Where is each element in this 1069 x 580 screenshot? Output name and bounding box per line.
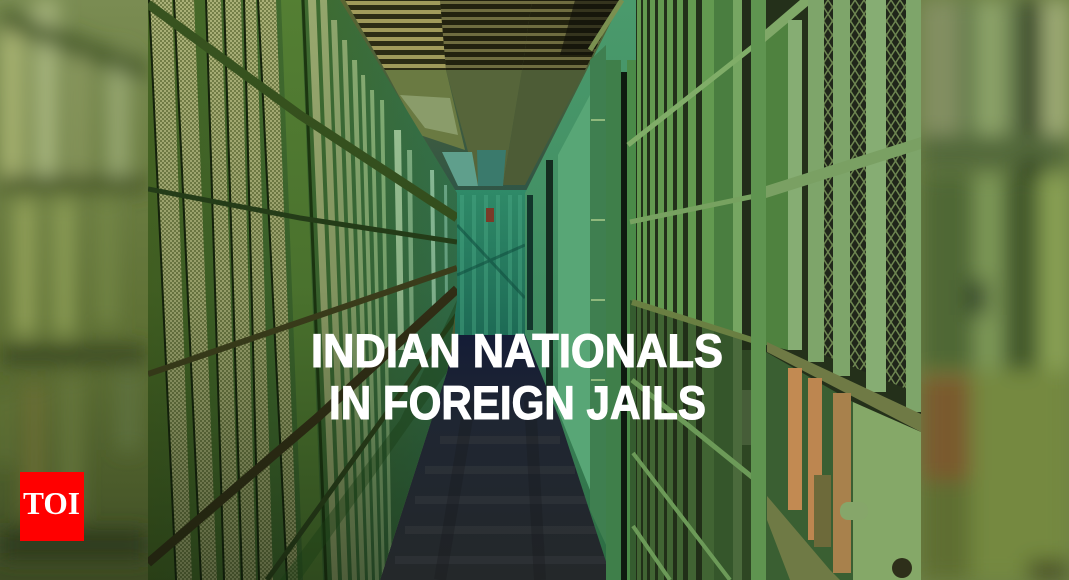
floor [380, 335, 625, 580]
right wall far section [525, 0, 640, 580]
right wall middle cell section [628, 0, 758, 580]
title: IN FOREIGN JAILS [329, 376, 706, 429]
title: INDIAN NATIONALS [311, 324, 723, 377]
TOI logo [20, 472, 84, 541]
blurred background right panel [921, 0, 1069, 580]
right wall foreground cell with bars [751, 0, 921, 580]
ceiling [340, 0, 622, 193]
back wall [455, 190, 527, 338]
TOI logo: TOI [23, 485, 80, 521]
left wall of cell bars and mesh [148, 0, 460, 580]
blurred background left panel [0, 0, 148, 580]
title [311, 324, 723, 429]
